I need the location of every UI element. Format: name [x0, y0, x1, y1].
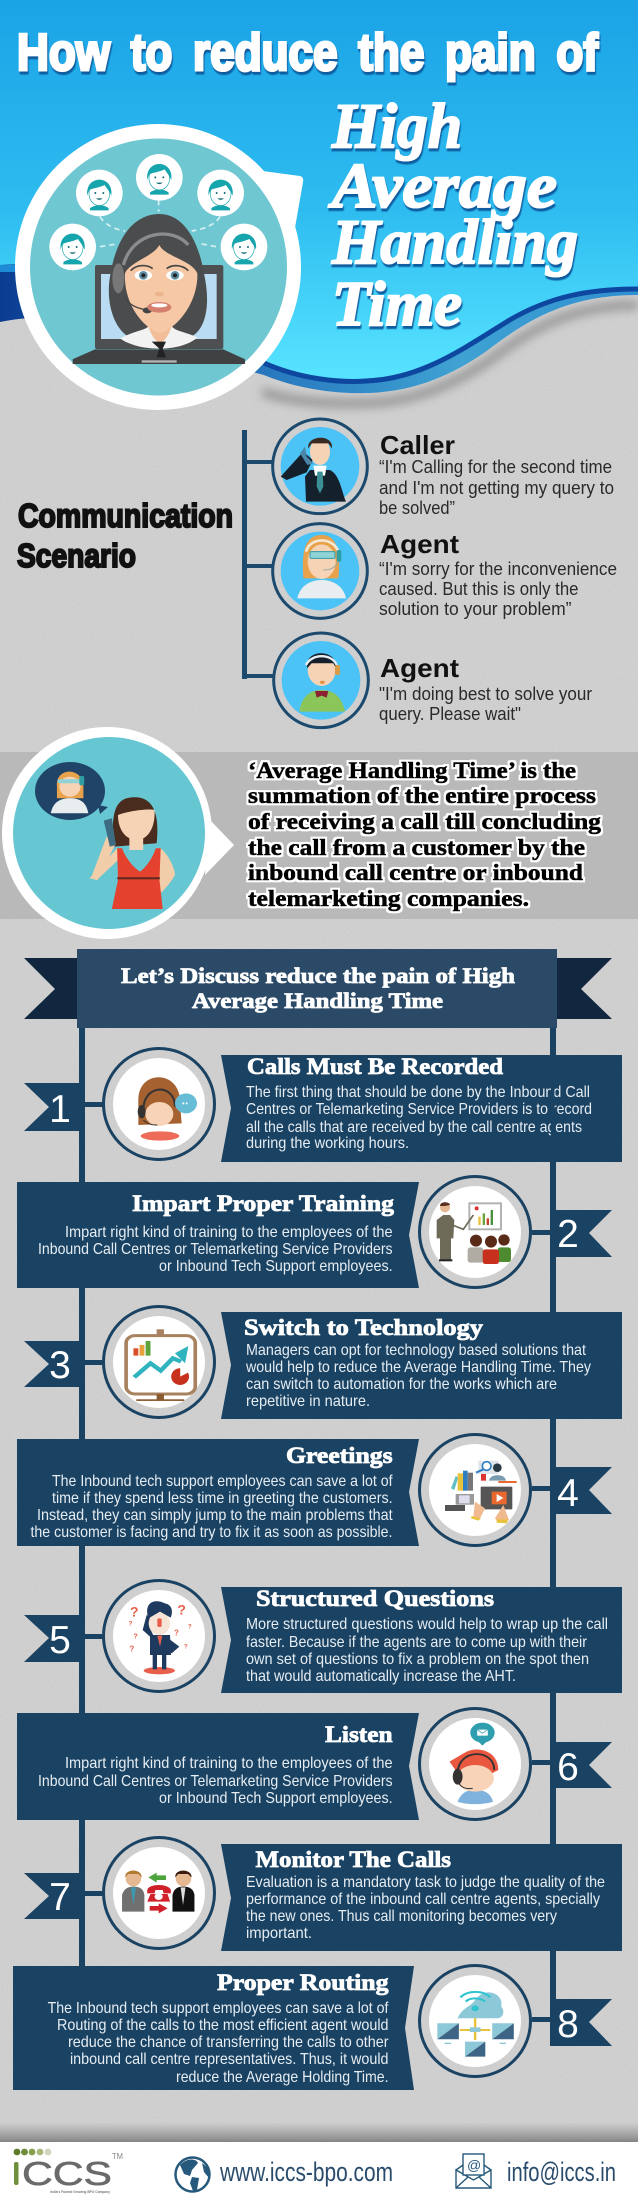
step 7: Monitor The Calls: [24, 1838, 622, 1951]
title: High Average Handling Time: High: [331, 90, 462, 161]
number flag 4: [532, 1467, 612, 1515]
heading: Communication Scenario: Communication: [18, 497, 233, 534]
text: caller quote: Caller: [380, 430, 455, 460]
number flag 6: 6: [557, 1746, 579, 1789]
ribbon heading: Average Handling Time: [192, 988, 443, 1013]
number flag 2: [532, 1210, 612, 1257]
panel: Calls Must Be Recorded: during the working hours.: [246, 1135, 409, 1152]
title: High Average Handling Time: Average: [328, 150, 557, 221]
icon: confused man: ?: [129, 1645, 134, 1654]
illustration: customer on phone in speech bubble: [2, 727, 234, 939]
number flag 5: [24, 1615, 104, 1662]
text: agent wait quote: query. Please wait": [379, 703, 521, 724]
text: agent apology quote: “I'm sorry for the inconvenience: [379, 558, 617, 579]
number flag 2: 2: [557, 1213, 579, 1256]
icon: confused man: ?: [177, 1601, 186, 1617]
step 8: Proper Routing: [13, 1966, 612, 2090]
website address: www.iccs-bpo.com: [219, 2157, 393, 2187]
step 2: Impart Proper Training: [17, 1176, 612, 1288]
panel: Listen: Inbound Call Centres or Telemarketing Service Providers: [38, 1773, 393, 1790]
icon: growth chart board: [104, 1306, 214, 1418]
panel: Impart Proper Training: Impart Proper Training: [132, 1191, 395, 1216]
ribbon heading: [24, 949, 612, 1028]
icon: caller: [273, 419, 367, 514]
text: average handling time definition: the call from a customer by the: [248, 835, 585, 860]
text: caller quote: [379, 430, 614, 518]
icon: confused man: ?: [128, 1621, 132, 1628]
step 3: Switch to Technology: [24, 1306, 622, 1419]
text: average handling time definition: inbound call centre or inbound: [248, 860, 583, 885]
panel: Structured Questions: Structured Questions: [256, 1586, 494, 1611]
panel: Calls Must Be Recorded: The first thing that should be done by the Inbound Call: [246, 1084, 590, 1101]
panel: Proper Routing: Proper Routing: [217, 1970, 389, 1995]
panel: Proper Routing: Routing of the calls to the most efficient agent would: [57, 2017, 388, 2034]
text: agent apology quote: caused. But this is only the: [379, 578, 578, 599]
text: average handling time definition: telemarketing companies.: [248, 886, 529, 911]
panel: Greetings: Instead, they can simply jump to the main problems that: [37, 1507, 393, 1524]
logo: ICCS: [14, 2149, 123, 2194]
step 6: Listen: [17, 1708, 612, 1820]
panel: Listen: Listen: [325, 1722, 393, 1747]
number flag 8: [532, 1999, 612, 2046]
timeline rails: [79, 1028, 556, 2003]
panel: Proper Routing: reduce the Average Holding Time.: [176, 2069, 388, 2086]
definition band: [0, 752, 638, 919]
panel: Impart Proper Training: Impart right kind of training to the employees of the: [65, 1224, 393, 1241]
number flag 8: 8: [557, 2003, 579, 2046]
header wave background: [0, 0, 638, 403]
illustration: agent in speech bubble with customers: [15, 124, 303, 410]
number flag 7: [24, 1873, 104, 1919]
icon: envelope: [456, 2154, 491, 2188]
title: High Average Handling Time: Handling: [331, 206, 578, 277]
panel: Monitor The Calls: important.: [246, 1925, 312, 1942]
icon: cloud network: [420, 1966, 530, 2076]
number flag 1: 1: [49, 1088, 71, 1131]
panel: Proper Routing: reduce the chance of transferring the calls to other: [68, 2034, 389, 2051]
panel: Greetings: the customer is facing and try to fix it as soon as possible.: [30, 1524, 392, 1541]
icon: female agent: [273, 524, 367, 618]
heading: Communication Scenario: [17, 497, 233, 574]
icon: confused man: ?: [174, 1629, 179, 1638]
step 1: Calls Must Be Recorded: [24, 1048, 622, 1162]
icon: confused man: ?: [130, 1604, 139, 1620]
panel: Switch to Technology: [221, 1312, 622, 1419]
panel: Calls Must Be Recorded: [221, 1054, 622, 1162]
panel: Monitor The Calls: Evaluation is a mandatory task to judge the quality of the: [246, 1874, 605, 1891]
icon: globe: [176, 2158, 210, 2192]
icon: confused man: ?: [188, 1624, 192, 1630]
text: average handling time definition: [248, 758, 602, 911]
footer: [0, 2142, 638, 2199]
panel: Calls Must Be Recorded: Calls Must Be Recorded: [247, 1054, 503, 1079]
panel: Listen: or Inbound Tech Support employees.: [159, 1790, 393, 1807]
number flag 7: 7: [49, 1876, 71, 1919]
title: High Average Handling Time: Time: [332, 268, 462, 339]
panel: Structured Questions: that would automatically increase the AHT.: [246, 1668, 516, 1685]
text: agent apology quote: solution to your problem”: [379, 598, 572, 619]
tree connector lines: [242, 430, 273, 679]
icon: devices and media: [420, 1434, 530, 1546]
panel: Greetings: [17, 1439, 419, 1546]
icon: agent with headset: [104, 1048, 214, 1160]
panel: Greetings: Greetings: [286, 1443, 393, 1468]
icon: confused man: ?: [133, 1631, 138, 1640]
number flag 3: 3: [49, 1344, 71, 1387]
text: caller quote: be solved”: [379, 497, 455, 518]
number flag 6: [532, 1742, 612, 1789]
panel: Switch to Technology: Switch to Technology: [244, 1315, 484, 1340]
panel: Impart Proper Training: [17, 1182, 419, 1288]
icon: trainer presenting: [420, 1176, 530, 1288]
panel: Structured Questions: More structured questions would help to wrap up the call: [246, 1616, 608, 1633]
ribbon heading: Let’s Discuss reduce the pain of High: [121, 963, 515, 988]
text: agent wait quote: Agent: [380, 653, 459, 683]
icon: two agents and phone: [104, 1838, 214, 1948]
title: High Average Handling Time: [328, 90, 578, 339]
text: agent apology quote: Agent: [380, 529, 459, 559]
logo: ICCS: TM: [112, 2152, 123, 2161]
icon: confused man: [104, 1580, 214, 1692]
number flag 4: 4: [557, 1472, 579, 1515]
panel: Impart Proper Training: or Inbound Tech Support employees.: [159, 1258, 393, 1275]
icon: support agent with message: [420, 1708, 530, 1820]
panel: Listen: Impart right kind of training to the employees of the: [65, 1755, 393, 1772]
panel: Calls Must Be Recorded: Centres or Telemarketing Service Providers is to record: [246, 1101, 592, 1118]
panel: Switch to Technology: would help to reduce the Average Handling Time. They: [245, 1359, 591, 1376]
icon: confused man: ?: [184, 1644, 188, 1650]
icon: male agent: [274, 633, 368, 728]
panel: Monitor The Calls: the new ones. Thus call monitoring becomes very: [246, 1908, 557, 1925]
logo: ICCS: India's Fastest Growing BPO Company: [50, 2189, 111, 2194]
panel: Switch to Technology: repetitive in nature.: [246, 1393, 370, 1410]
panel: Switch to Technology: Managers can opt for technology based solutions that: [246, 1342, 586, 1359]
footer shadow: [0, 2122, 638, 2142]
text: agent apology quote: [379, 529, 617, 619]
panel: Proper Routing: inbound call centre representatives. Thus, it would: [70, 2051, 388, 2068]
panel: Listen: [17, 1713, 419, 1820]
panel: Proper Routing: The Inbound tech support employees can save a lot of: [48, 2000, 389, 2017]
panel: Switch to Technology: can switch to automation for the works which are: [246, 1376, 557, 1393]
text: average handling time definition: ‘Average Handling Time’ is the: [248, 758, 576, 783]
number flag 1: [24, 1083, 104, 1131]
text: average handling time definition: summation of the entire process: [248, 783, 596, 808]
text: agent wait quote: "I'm doing best to solve your: [379, 683, 592, 704]
text: caller quote: “I'm Calling for the second time: [379, 456, 612, 477]
panel: Monitor The Calls: [221, 1844, 622, 1951]
panel: Structured Questions: [221, 1586, 622, 1693]
panel: Monitor The Calls: Monitor The Calls: [256, 1847, 451, 1872]
panel: Proper Routing: [13, 1966, 414, 2090]
icon: envelope: @: [467, 2157, 481, 2173]
text: average handling time definition: of receiving a call till concluding: [248, 809, 602, 834]
panel: Structured Questions: own set of questions to fix a problem on the spot then: [246, 1651, 589, 1668]
step 4: Greetings: [17, 1434, 612, 1546]
panel: Greetings: The Inbound tech support employees can save a lot of: [52, 1473, 393, 1490]
panel: Structured Questions: faster. Because if the agents are to come up with their: [246, 1634, 588, 1651]
number flag 5: 5: [49, 1619, 71, 1662]
logo: ICCS: CCS: [22, 2155, 112, 2192]
panel: Impart Proper Training: Inbound Call Centres or Telemarketing Service Providers: [38, 1241, 393, 1258]
text: caller quote: and I'm not getting my query to: [379, 477, 614, 498]
heading: Communication Scenario: Scenario: [17, 537, 136, 574]
panel: Calls Must Be Recorded: all the calls that are received by the call centre agents: [246, 1119, 582, 1136]
panel: Greetings: time if they spend less time in greeting the customers.: [52, 1490, 393, 1507]
number flag 3: [24, 1341, 104, 1387]
panel: Monitor The Calls: performance of the inbound call centre agents, specially: [246, 1891, 600, 1908]
step 5: Structured Questions: [24, 1580, 622, 1693]
text: agent wait quote: [379, 653, 592, 724]
